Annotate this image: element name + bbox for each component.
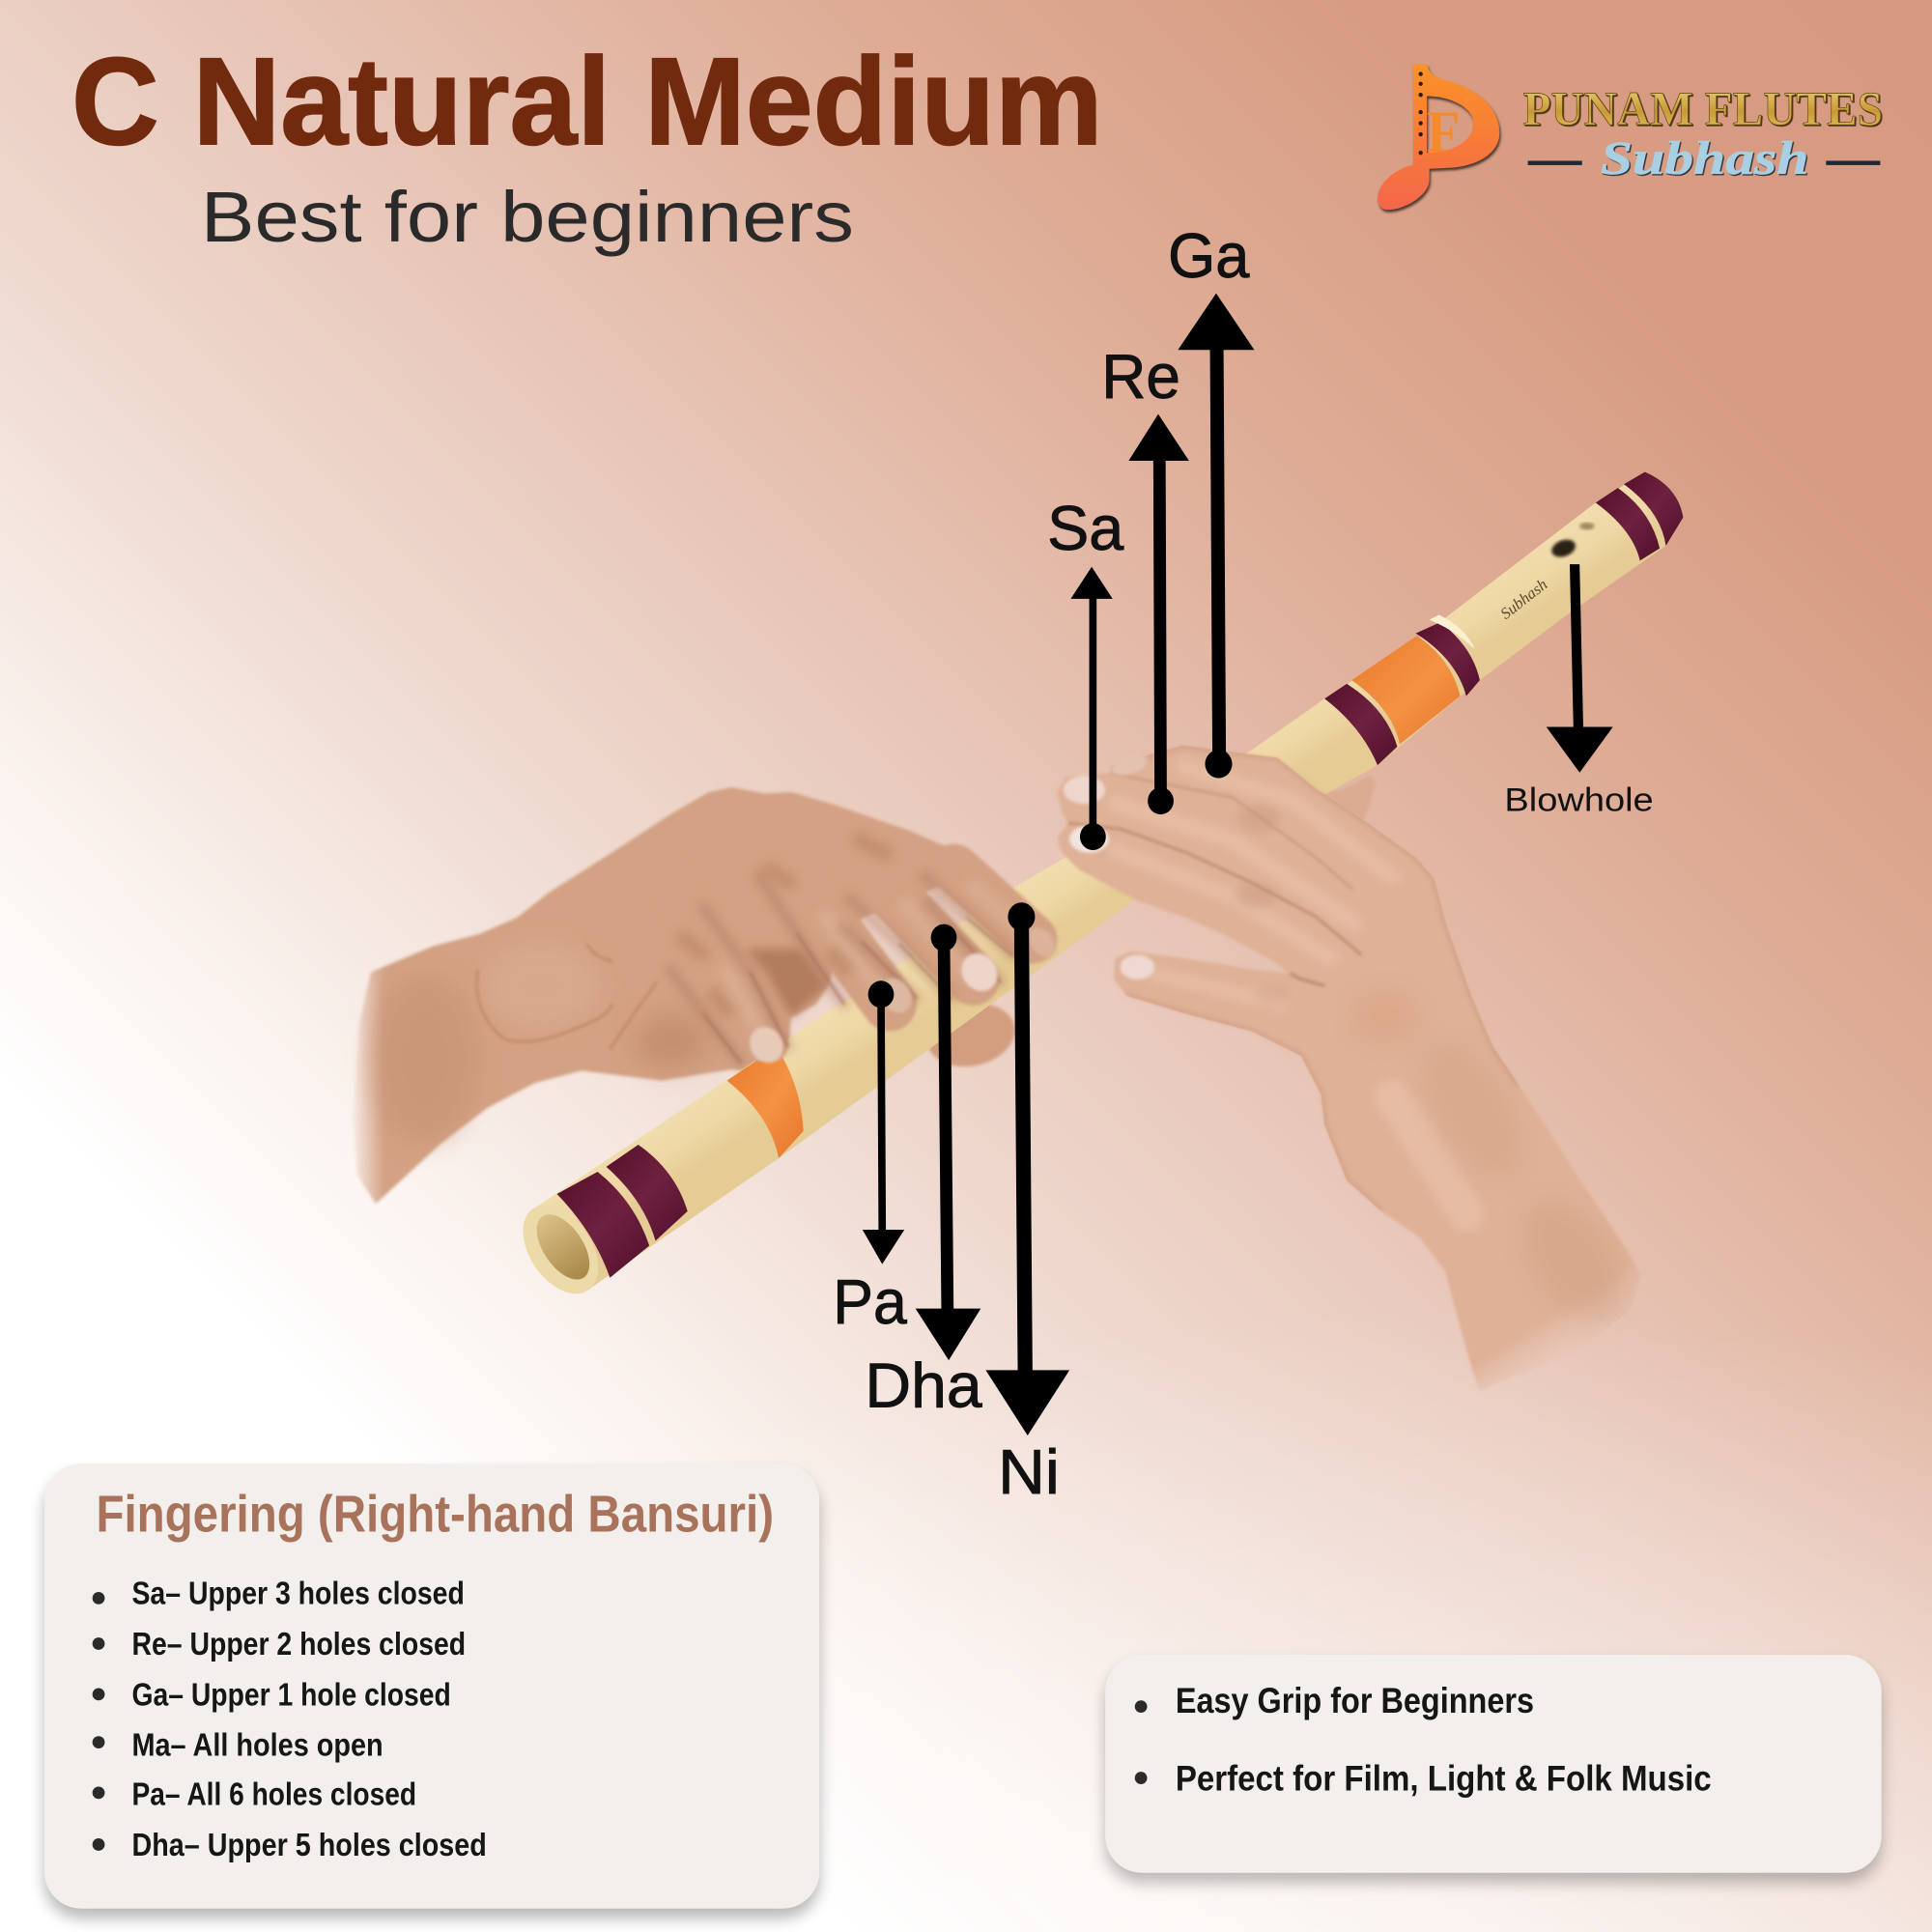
- subtitle: Best for beginners: [201, 177, 854, 257]
- middle finger: [856, 856, 974, 980]
- arrow: Ni: [985, 902, 1069, 1435]
- arrow: Re: [1128, 414, 1189, 814]
- label: Dha: Dha: [865, 1350, 982, 1421]
- maroon bands lower: [557, 1145, 688, 1278]
- label: Ni: Ni: [998, 1436, 1060, 1507]
- left hand fingers: [670, 840, 1061, 1068]
- bullet list: Dha– Upper 5 holes closed: [131, 1828, 487, 1863]
- finger highlights: [1115, 766, 1466, 1213]
- logo letter F: F: [1427, 99, 1460, 165]
- flute maker mark: Subhash: [1496, 575, 1550, 623]
- knuckles and wrist tone: [1236, 806, 1644, 1340]
- flute: [507, 472, 1683, 1307]
- right hand nails: [1064, 752, 1154, 980]
- panel: benefits: [1105, 1655, 1882, 1883]
- left hand palm and thumb: [353, 787, 1021, 1204]
- logo: Punam Flutes Subhash: [1378, 64, 1883, 210]
- title: C Natural Medium: [71, 32, 1103, 171]
- arrow: Sa: [1070, 567, 1113, 850]
- logo rules: [1528, 160, 1880, 165]
- finger creases: [703, 918, 1012, 1062]
- soft finger shadows: [670, 876, 1012, 1062]
- label: Ga: Ga: [1168, 220, 1250, 291]
- right hand creases: [1068, 773, 1361, 985]
- bullet list: Re– Upper 2 holes closed: [131, 1627, 466, 1662]
- arrow: Dha: [916, 924, 980, 1360]
- bullet list: Pa– All 6 holes closed: [131, 1777, 416, 1813]
- orange band lower: [727, 1047, 804, 1158]
- right hand: [1057, 746, 1644, 1391]
- brand name: PUNAM FLUTES: [1523, 82, 1883, 135]
- edge shadow: [1112, 746, 1520, 1211]
- label: Re: Re: [1101, 341, 1180, 412]
- panel: fingering: [44, 1463, 819, 1918]
- arrow: Blowhole: [1547, 564, 1613, 773]
- flute stem holes: [1418, 71, 1423, 155]
- flute body: [533, 472, 1683, 1290]
- knuckle shading: [684, 840, 885, 1010]
- label: Pa: Pa: [833, 1266, 908, 1337]
- script name: Subhash: [1601, 133, 1808, 185]
- left thumb: [922, 996, 1021, 1074]
- bullet list: Ga– Upper 1 hole closed: [131, 1677, 451, 1713]
- benefit: easy grip: Easy Grip for Beginners: [1176, 1681, 1534, 1720]
- arrow: Ga: [1178, 294, 1254, 778]
- bullet list: Ma– All holes open: [131, 1728, 384, 1764]
- left hand shading: [373, 941, 828, 1144]
- right hand shading: [1112, 746, 1644, 1340]
- benefit: music styles: Perfect for Film, Light & Folk Music: [1176, 1758, 1712, 1798]
- nails: [743, 923, 1061, 1068]
- panel heading: Fingering (Right-hand Bansuri): [96, 1486, 774, 1543]
- icon: music note with flute stem: [1378, 64, 1499, 210]
- open end: [507, 1191, 613, 1307]
- pinky finger: [671, 881, 764, 1042]
- label: Sa: Sa: [1047, 493, 1124, 563]
- bullet list: Sa– Upper 3 holes closed: [131, 1577, 465, 1612]
- label: Blowhole: Blowhole: [1504, 781, 1654, 818]
- right thumb behind flute: [1319, 775, 1377, 850]
- middle bands: [1324, 614, 1480, 765]
- arrow: Pa: [863, 980, 904, 1264]
- upper bands: [1596, 472, 1683, 560]
- benefit bullets: [1135, 1700, 1148, 1784]
- blowhole: [1549, 536, 1577, 560]
- ring finger: [788, 868, 890, 1005]
- bullet list: [93, 1577, 487, 1863]
- index finger: [955, 868, 1033, 939]
- finger highlights: [727, 887, 1029, 1033]
